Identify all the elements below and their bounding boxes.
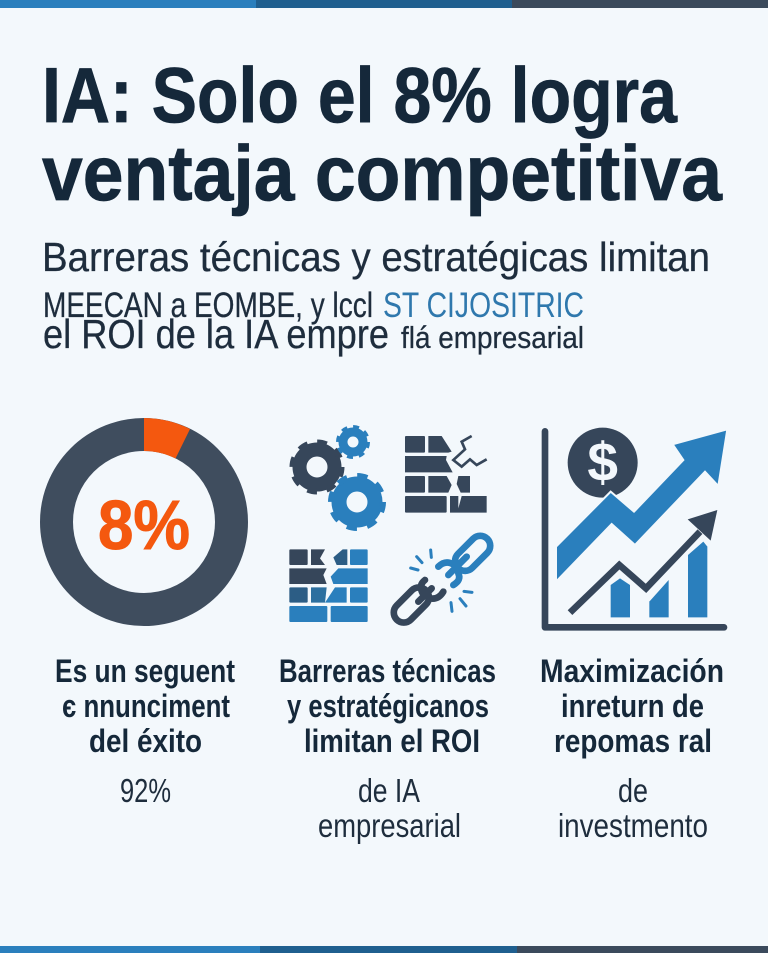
donut chart: 8% <box>56 418 232 610</box>
icon: brick wall <box>289 549 368 622</box>
column 3 text <box>540 653 724 844</box>
column 3 text: repomas ral <box>554 723 712 759</box>
icon: gears <box>292 427 383 528</box>
column 2 text: y estratégicanos <box>287 688 489 724</box>
title <box>42 51 723 217</box>
subtitle: Barreras técnicas y estratégicas limitan <box>42 234 710 280</box>
bottom colour bar <box>0 946 768 953</box>
column 3 text: inreturn de <box>561 688 704 724</box>
column 2 text: limitan el ROI <box>304 723 480 759</box>
subtitle: ST CIJOSITRIC <box>383 286 584 325</box>
column 2 text: Barreras técnicas <box>279 653 496 689</box>
column 1 text: 92% <box>120 772 171 809</box>
title: IA: Solo el 8% logra <box>42 51 678 139</box>
donut chart: 8%: 8% <box>98 486 190 564</box>
column 1 text: Es un seguent <box>55 653 235 689</box>
column 1 text: є nnunciment <box>62 688 230 724</box>
subtitle <box>42 234 710 357</box>
column 3 text: investmento <box>558 807 708 844</box>
column 2 text <box>279 653 496 844</box>
subtitle: el ROI de la IA empre <box>43 311 389 357</box>
top colour bar <box>0 0 768 8</box>
column 1 text <box>55 653 235 809</box>
column 2 text: de IA <box>358 772 420 809</box>
column 3 text: de <box>618 772 648 809</box>
icon: cracked wall <box>405 436 487 513</box>
icon: growth chart <box>545 428 727 627</box>
column 3 text: Maximización <box>540 653 724 689</box>
column 2 text: empresarial <box>318 807 461 844</box>
subtitle: flá empresarial <box>401 320 584 355</box>
icon: broken chain <box>390 532 494 627</box>
subtitle: MEECAN a EOMBE, y lccl <box>43 286 373 325</box>
column 1 text: del éxito <box>89 723 202 759</box>
icon: growth chart: $ <box>587 431 618 493</box>
title: ventaja competitiva <box>42 129 723 217</box>
